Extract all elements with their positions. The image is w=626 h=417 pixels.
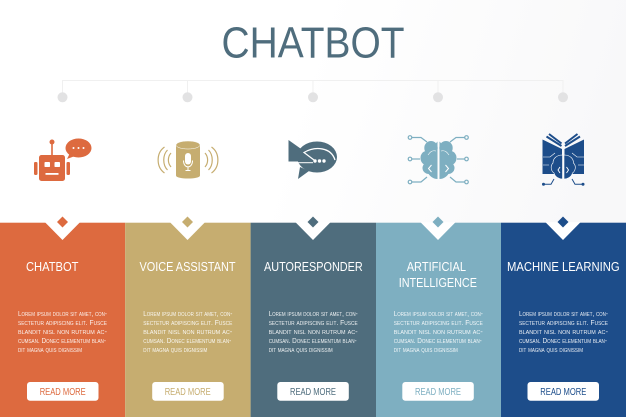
heading: AUTORESPONDER xyxy=(264,259,363,274)
icon: autoresponder speech bubble with return arrow xyxy=(288,140,337,179)
timeline connector with dots xyxy=(58,80,568,102)
button: READ MORE xyxy=(415,387,461,398)
body text: dit magna quis dignissim xyxy=(269,347,333,354)
button: READ MORE xyxy=(40,387,86,398)
body text: dit magna quis dignissim xyxy=(143,347,207,354)
icon: smart speaker with sound waves xyxy=(158,141,218,178)
panel: chatbot xyxy=(0,216,125,417)
button xyxy=(152,382,224,401)
body text: blandit nisl non rutrum ac- xyxy=(394,329,484,336)
button xyxy=(402,382,474,401)
body text: sectetur adipiscing elit. Fusce xyxy=(519,320,609,327)
body text: blandit nisl non rutrum ac- xyxy=(269,329,358,336)
button xyxy=(528,382,599,401)
body text: dit magna quis dignissim xyxy=(519,347,583,354)
panel: machine learning xyxy=(501,216,626,417)
notch and diamond xyxy=(170,216,205,240)
heading: INTELLIGENCE xyxy=(399,275,477,290)
panel: artificial intelligence xyxy=(376,216,501,417)
heading: VOICE ASSISTANT xyxy=(140,259,236,274)
body text: Lorem ipsum dolor sit amet, con- xyxy=(394,311,483,318)
notch and diamond xyxy=(546,216,580,240)
title: CHATBOT xyxy=(222,19,404,68)
body text: sectetur adipiscing elit. Fusce xyxy=(269,320,358,327)
heading: CHATBOT xyxy=(26,259,79,274)
notch and diamond xyxy=(420,216,456,240)
body text: blandit nisl non rutrum ac- xyxy=(18,329,108,336)
body text: sectetur adipiscing elit. Fusce xyxy=(18,320,108,327)
icon: book with brain xyxy=(542,134,584,186)
body text: Lorem ipsum dolor sit amet, con- xyxy=(143,311,233,318)
body text xyxy=(519,311,609,354)
body text: cumsan. Donec elementum blan- xyxy=(269,338,357,345)
heading xyxy=(399,259,477,290)
button xyxy=(277,382,349,401)
body text: dit magna quis dignissim xyxy=(18,347,82,354)
body text xyxy=(18,311,108,354)
heading: ARTIFICIAL xyxy=(407,259,466,274)
body text: cumsan. Donec elementum blan- xyxy=(18,338,107,345)
icon: brain with circuit lines xyxy=(408,136,468,184)
body text: Lorem ipsum dolor sit amet, con- xyxy=(519,311,609,318)
body text: blandit nisl non rutrum ac- xyxy=(143,329,233,336)
body text: sectetur adipiscing elit. Fusce xyxy=(143,320,233,327)
notch and diamond xyxy=(45,216,80,240)
body text xyxy=(394,311,484,354)
button: READ MORE xyxy=(290,387,336,398)
body text: Lorem ipsum dolor sit amet, con- xyxy=(18,311,108,318)
panel: autoresponder xyxy=(251,216,376,417)
button: READ MORE xyxy=(165,387,211,398)
button: READ MORE xyxy=(540,387,587,398)
body text: Lorem ipsum dolor sit amet, con- xyxy=(269,311,358,318)
body text: sectetur adipiscing elit. Fusce xyxy=(394,320,483,327)
body text xyxy=(269,311,358,354)
body text: cumsan. Donec elementum blan- xyxy=(143,338,232,345)
body text: dit magna quis dignissim xyxy=(394,347,458,354)
body text: cumsan. Donec elementum blan- xyxy=(394,338,482,345)
body text xyxy=(143,311,233,354)
body text: blandit nisl non rutrum ac- xyxy=(519,329,609,336)
notch and diamond xyxy=(296,216,330,240)
icon: robot with speech bubble xyxy=(34,138,92,181)
panel: voice assistant xyxy=(125,216,251,417)
button xyxy=(27,382,98,401)
body text: cumsan. Donec elementum blan- xyxy=(519,338,608,345)
